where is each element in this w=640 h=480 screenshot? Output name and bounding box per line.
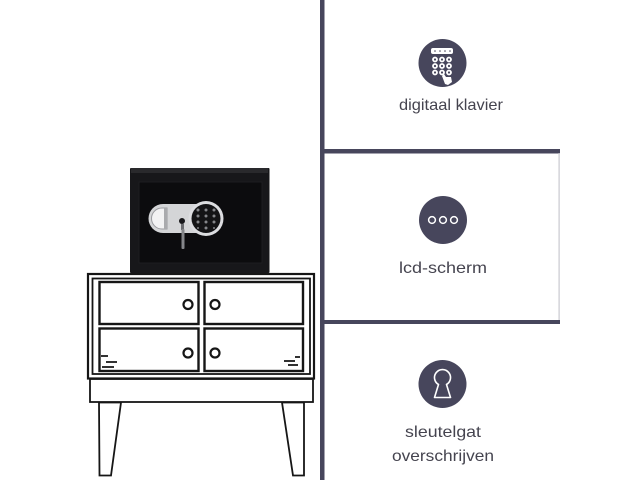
label: digitaal klavier (399, 97, 504, 114)
feature: sleutelgat overschrijven (392, 360, 494, 465)
cabinet frame (88, 274, 314, 378)
feature: lcd-scherm (399, 196, 487, 277)
label: sleutelgat (405, 424, 482, 441)
door knobs (184, 300, 220, 358)
safe body (130, 168, 270, 273)
label line 2: overschrijven (392, 448, 494, 465)
safe door (139, 182, 262, 263)
label: lcd-scherm (399, 260, 487, 277)
top right door (204, 282, 303, 324)
icon: three dots display (419, 196, 467, 244)
icon: keypad with pointing hand (418, 39, 466, 87)
handle (152, 208, 167, 229)
key (179, 218, 185, 249)
keypad buttons (196, 208, 216, 230)
illustration: safe (130, 168, 270, 273)
icon: keyhole (418, 360, 466, 408)
cabinet base (90, 379, 313, 402)
top left door (100, 282, 198, 324)
glass reflection marks (101, 356, 300, 367)
bottom right door (204, 328, 303, 371)
lock panel (148, 201, 224, 249)
bottom left door (100, 328, 198, 371)
illustration: cabinet (88, 274, 314, 476)
feature: digitaal klavier (399, 39, 504, 114)
cabinet legs (99, 402, 304, 476)
